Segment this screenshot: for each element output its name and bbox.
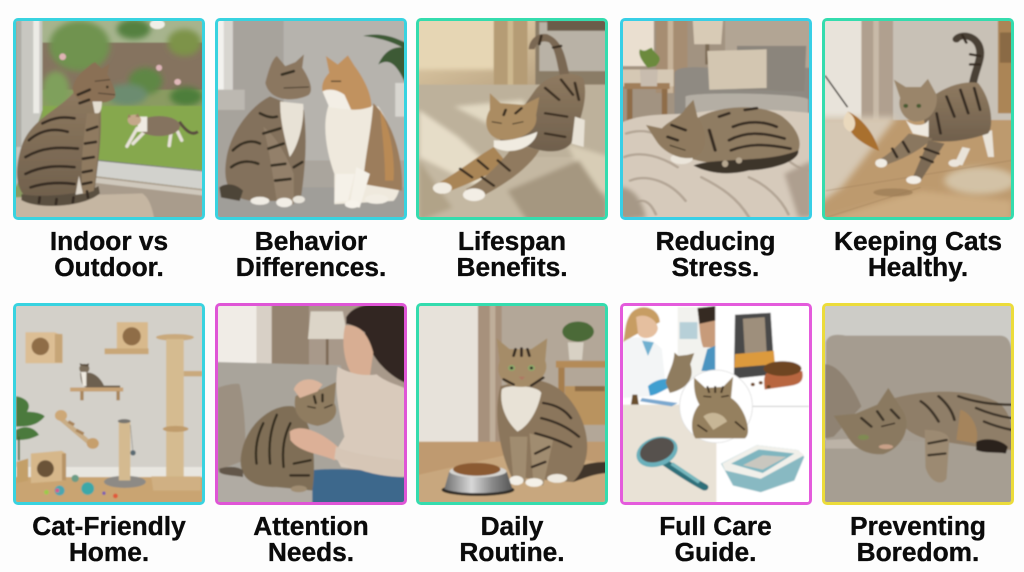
grooming brush — [629, 430, 704, 487]
side table and plant — [556, 321, 609, 435]
tabby cat — [219, 54, 311, 207]
food bowl — [442, 463, 514, 496]
caption: Lifespan — [458, 226, 566, 256]
lying tabby cat — [834, 388, 1013, 482]
card: Attention Needs — [215, 303, 407, 567]
small scratching post — [104, 419, 146, 488]
litter box — [721, 445, 804, 492]
wall cube left — [25, 332, 63, 363]
woman — [312, 304, 405, 504]
caption: Indoor vs — [50, 226, 168, 256]
tabby cat stretching — [433, 34, 585, 201]
caption — [834, 226, 1002, 282]
plant — [16, 396, 45, 483]
image panel: cat beside food bowl — [416, 303, 608, 505]
caption: Daily — [481, 511, 543, 541]
caption: Attention — [253, 511, 369, 541]
caption: Reducing — [656, 226, 775, 256]
plant — [363, 34, 405, 83]
image panel: care collage — [620, 303, 812, 505]
caption: Home. — [69, 537, 149, 567]
card: Keeping Cats Healthy — [822, 18, 1014, 282]
wall cube top — [105, 322, 149, 354]
curled tabby cat — [645, 100, 799, 173]
image panel: cat stretching on rug — [416, 18, 608, 220]
caption — [236, 226, 386, 282]
ramp with steps — [55, 410, 99, 449]
caption: Boredom. — [857, 537, 979, 567]
caption: Outdoor. — [54, 252, 164, 282]
wand and feather toy — [825, 76, 879, 151]
caption: Behavior — [255, 226, 367, 256]
caption — [253, 511, 369, 567]
caption: Stress. — [672, 252, 759, 282]
caption — [850, 511, 986, 567]
image panel: cat playing with feather toy — [822, 18, 1014, 220]
ginger and white cat — [322, 55, 402, 208]
caption: Benefits. — [456, 252, 568, 282]
card: Indoor vs Outdoor — [13, 18, 205, 282]
caption: Keeping Cats — [834, 226, 1002, 256]
image panel: cat at window watching outdoor cat — [13, 18, 205, 220]
caption: Cat-Friendly — [32, 511, 186, 541]
caption — [32, 511, 186, 567]
card: Reducing Stress — [620, 18, 812, 282]
food bag and bowl — [733, 313, 802, 390]
caption: Guide. — [675, 537, 756, 567]
image panel: two cats face to face — [215, 18, 407, 220]
card: Lifespan Benefits — [416, 18, 608, 282]
caption — [456, 226, 568, 282]
caption — [50, 226, 168, 282]
woman's hands and arm — [290, 379, 404, 477]
caption — [459, 511, 565, 567]
caption: Needs. — [268, 537, 354, 567]
tabby cat silhouette — [17, 62, 115, 206]
caption: Healthy. — [868, 252, 968, 282]
caption: Preventing — [850, 511, 986, 541]
caption — [659, 511, 772, 567]
image panel: cat sleeping on blanket — [620, 18, 812, 220]
image panel: wall shelves and cat tree — [13, 303, 205, 505]
floor cube — [31, 451, 66, 483]
caption: Differences. — [236, 252, 386, 282]
card: Daily Routine — [416, 303, 608, 567]
image panel: bored cat lying on sofa — [822, 303, 1014, 505]
tabby cat sitting — [497, 338, 607, 487]
toys — [44, 475, 118, 498]
card: Cat-Friendly Home — [13, 303, 205, 567]
vet and shelves — [622, 306, 715, 406]
card: Behavior Differences — [215, 18, 407, 282]
caption — [656, 226, 775, 282]
running tabby cat — [875, 35, 994, 184]
tall scratching post — [151, 334, 202, 491]
image panel: woman petting cat on sofa — [215, 303, 407, 505]
caption: Full Care — [659, 511, 772, 541]
cat portrait circle — [679, 370, 752, 443]
shelf with cat — [70, 363, 123, 400]
outdoor cat — [127, 113, 198, 146]
card: Preventing Boredom — [822, 303, 1014, 567]
caption: Routine. — [459, 537, 565, 567]
card: Full Care Guide — [620, 303, 812, 567]
cat being petted — [219, 382, 336, 492]
